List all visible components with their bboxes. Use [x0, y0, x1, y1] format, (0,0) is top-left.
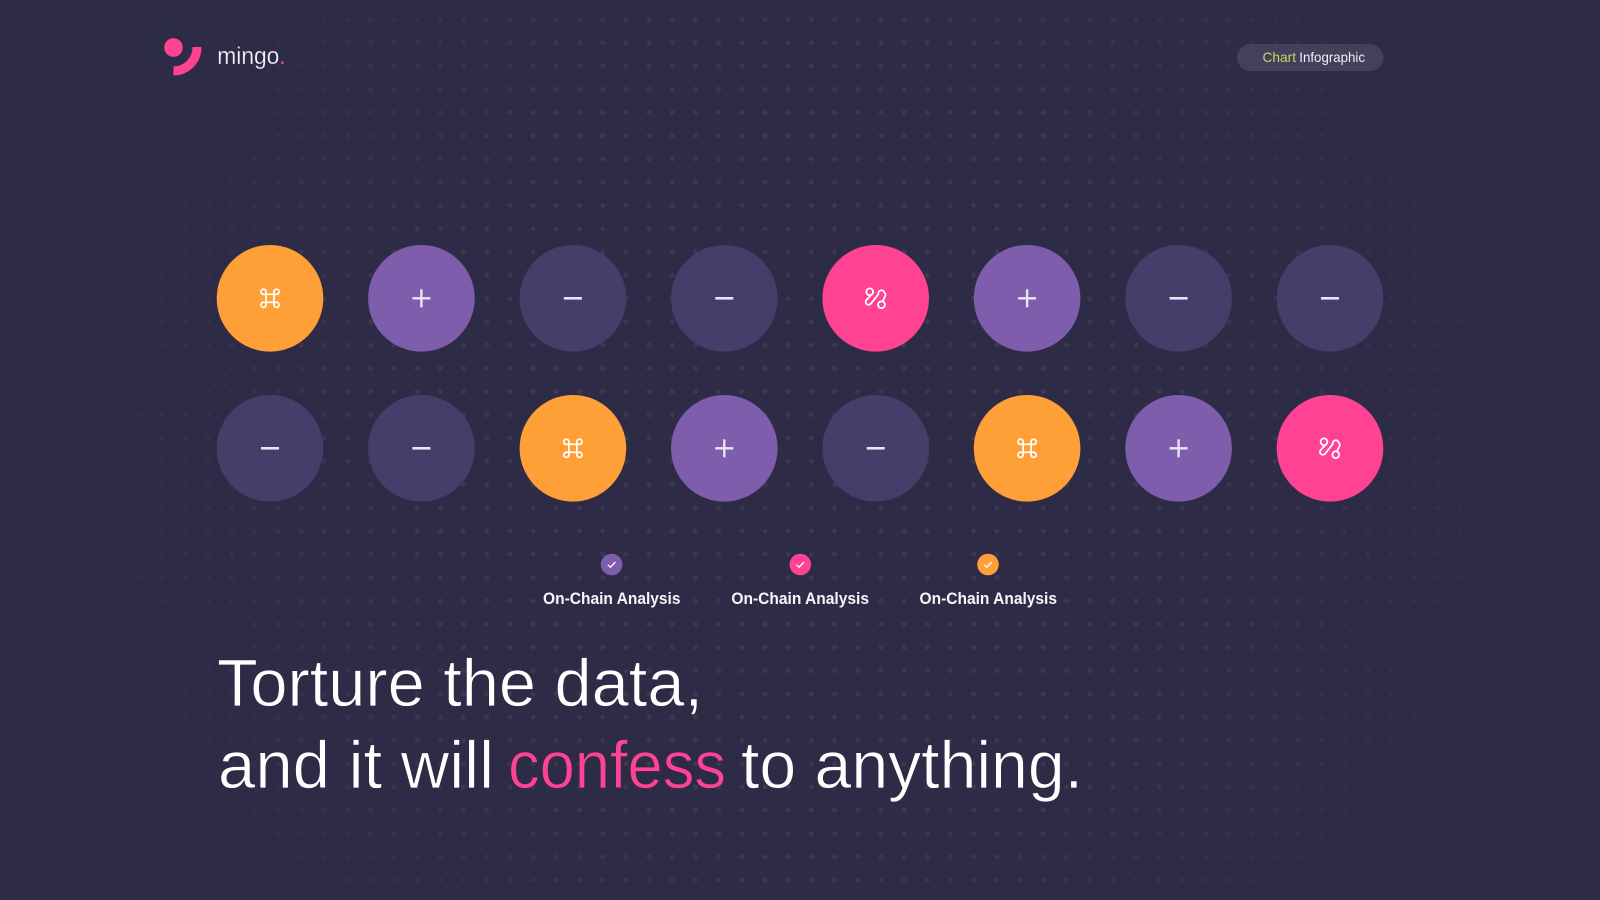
- circle: orange command: [217, 245, 323, 352]
- circle: pink link: [1277, 395, 1383, 502]
- circle: purple plus: [671, 395, 778, 502]
- legend item: purple: [543, 554, 680, 608]
- row 1: [217, 245, 1383, 352]
- logo dot: .: [279, 43, 286, 70]
- headline: Torture the data,: [217, 646, 703, 721]
- legend item: pink: [731, 554, 869, 608]
- headline: confess: [508, 728, 726, 803]
- legend item: orange: On-Chain Analysis: [920, 590, 1057, 608]
- circle: dark minus: [671, 245, 778, 352]
- badge: Chart Infographic: Chart: [1262, 49, 1296, 65]
- legend item: orange: [920, 554, 1057, 608]
- circle: dark minus: [368, 395, 475, 502]
- circle: purple plus: [368, 245, 475, 352]
- circle: orange command: [974, 395, 1080, 502]
- circle: dark minus: [1277, 245, 1383, 352]
- circle: orange command: [520, 395, 626, 502]
- circle: dark minus: [1125, 245, 1232, 352]
- circle: dark minus: [520, 245, 626, 352]
- headline: [217, 646, 1083, 803]
- chart: circle grid: [217, 245, 1383, 502]
- row 2: [217, 395, 1383, 502]
- headline: and it will: [218, 728, 494, 803]
- badge: Chart Infographic: [1237, 44, 1384, 71]
- circle: purple plus: [974, 245, 1080, 352]
- circle: purple plus: [1125, 395, 1232, 502]
- circle: dark minus: [822, 395, 929, 502]
- legend item: purple: On-Chain Analysis: [543, 590, 680, 608]
- icon: logo mark: [156, 30, 202, 76]
- circle: dark minus: [217, 395, 323, 502]
- legend item: pink: On-Chain Analysis: [731, 590, 869, 608]
- badge: Chart Infographic: Infographic: [1299, 49, 1365, 65]
- logo wordmark: mingo: [217, 43, 279, 70]
- headline: to anything.: [741, 728, 1083, 803]
- logo: [156, 30, 286, 76]
- legend: [543, 554, 1057, 608]
- circle: pink link: [822, 245, 929, 352]
